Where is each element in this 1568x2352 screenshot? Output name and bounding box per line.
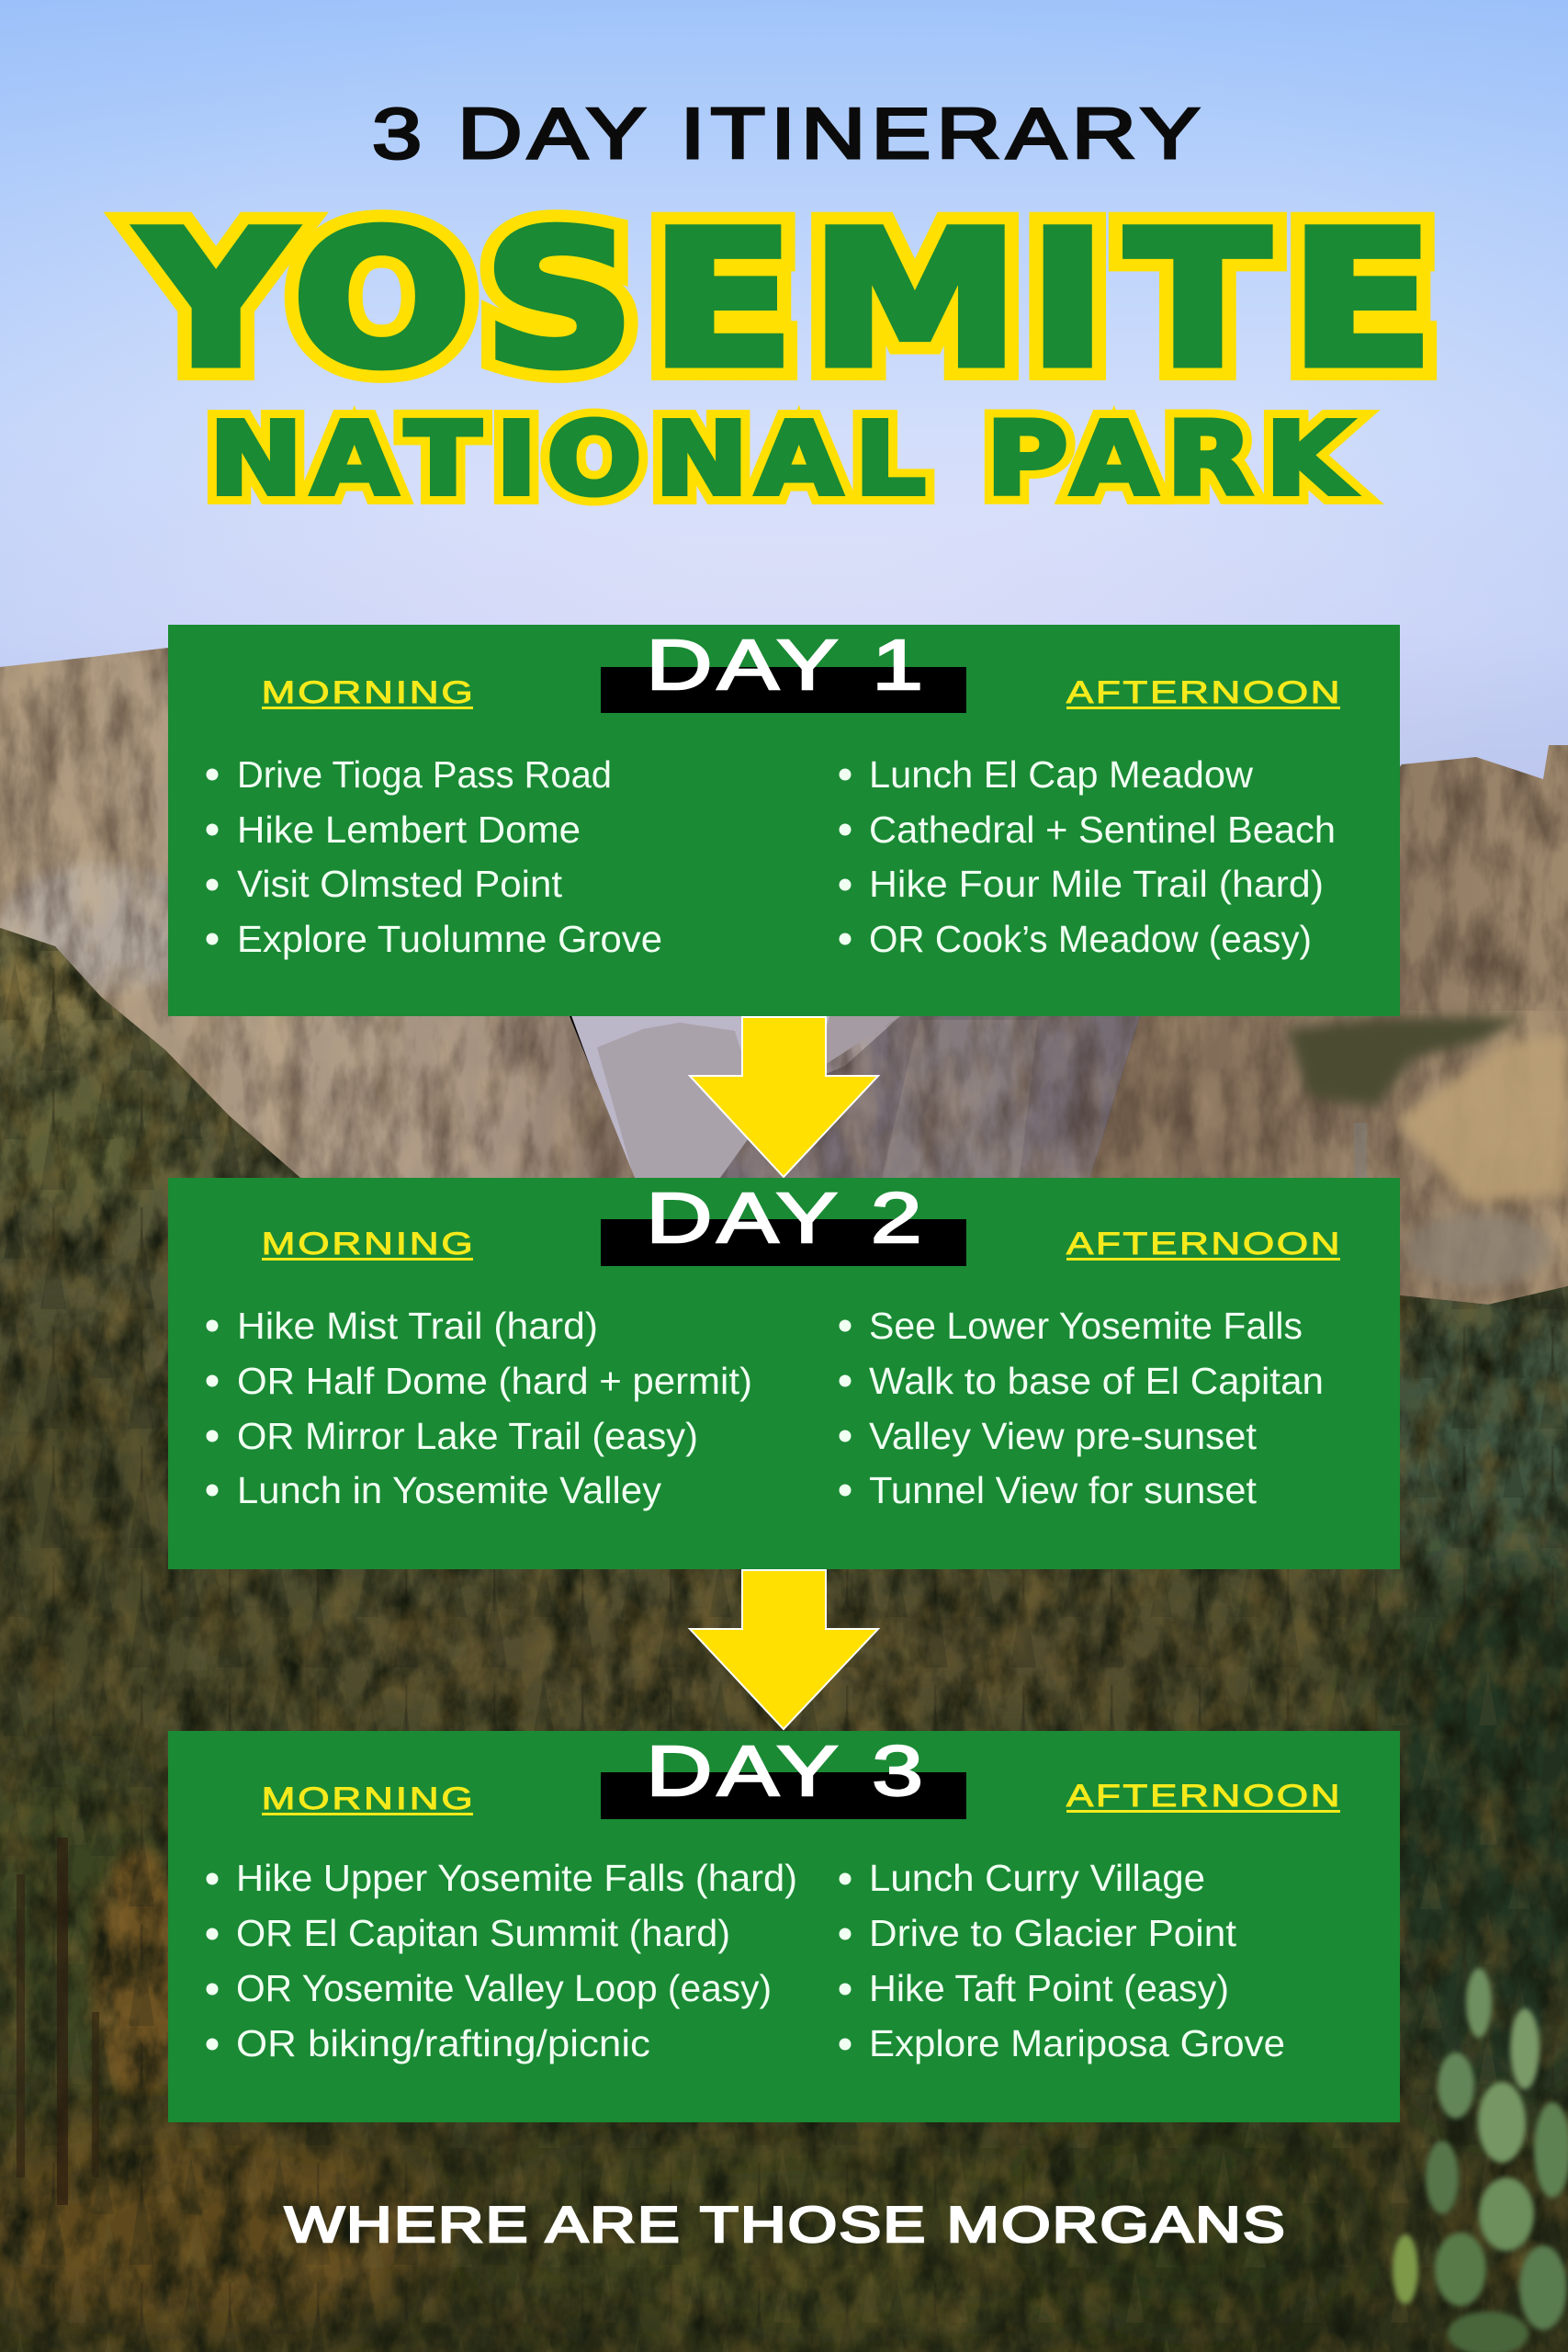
heading: day 1: DAY 1 (646, 625, 923, 704)
list: morning activities: OR Yosemite Valley Loop (easy) (236, 1967, 772, 2009)
panel: day 3 (168, 1731, 1400, 2122)
day 2 label bar (601, 1219, 966, 1266)
list: morning activities: OR El Capitan Summit (hard) (236, 1912, 730, 1954)
heading: morning: MORNING (262, 1781, 473, 1816)
panel: day 2 (168, 1178, 1400, 1569)
list: afternoon activities: Tunnel View for sunset (869, 1469, 1258, 1511)
heading: morning: MORNING (262, 675, 473, 710)
list: morning activities: OR Half Dome (hard + permit) (237, 1360, 752, 1402)
footer credit: WHERE ARE THOSE MORGANS (285, 2197, 1285, 2253)
list: morning activities: Lunch in Yosemite Valley (237, 1469, 662, 1511)
day 1 label bar (601, 667, 966, 713)
day 3 label bar (601, 1772, 966, 1819)
heading: afternoon: AFTERNOON (1066, 1779, 1340, 1814)
list: afternoon activities (840, 1857, 1285, 2064)
list: morning activities: Hike Upper Yosemite Falls (hard) (236, 1857, 797, 1899)
list: afternoon activities: Valley View pre-sunset (869, 1415, 1258, 1457)
list: afternoon activities: Lunch El Cap Meadow (869, 753, 1253, 796)
list: afternoon activities: Lunch Curry Village (869, 1857, 1205, 1899)
title: Yosemite: YOSEMITE (137, 192, 1434, 408)
list: afternoon activities (840, 1305, 1324, 1511)
list: afternoon activities: Cathedral + Sentinel Beach (869, 808, 1336, 851)
list: morning activities: Visit Olmsted Point (237, 863, 563, 905)
list: afternoon activities: See Lower Yosemite Falls (869, 1305, 1303, 1347)
list: afternoon activities: OR Cook’s Meadow (easy) (869, 918, 1312, 960)
heading: morning: MORNING (262, 1227, 473, 1261)
heading: day 2: DAY 2 (646, 1178, 922, 1257)
list: morning activities (206, 1857, 797, 2064)
list: morning activities (206, 1305, 752, 1511)
title: Yosemite: YOSEMITE (137, 192, 1434, 408)
list: morning activities: Explore Tuolumne Grove (237, 918, 662, 960)
subtitle: 3 Day Itinerary: 3 DAY ITINERARY (372, 93, 1200, 174)
list: afternoon activities: Hike Taft Point (easy) (869, 1967, 1229, 2009)
arrow: day 1 to day 2 (690, 1017, 878, 1177)
background: granite valley and forest (0, 643, 1568, 2352)
heading: afternoon: AFTERNOON (1066, 1227, 1340, 1261)
list: morning activities: Hike Mist Trail (hard) (237, 1305, 598, 1347)
background: sky (0, 0, 1568, 790)
list: morning activities: Drive Tioga Pass Road (237, 753, 612, 796)
title: National Park: NATIONAL PARK (209, 401, 1356, 518)
title: National Park: NATIONAL PARK (209, 401, 1356, 518)
list: afternoon activities: Hike Four Mile Trail (hard) (869, 863, 1324, 905)
list: afternoon activities: Walk to base of El Capitan (869, 1360, 1324, 1402)
panel: day 1 (168, 625, 1400, 1016)
list: afternoon activities: Drive to Glacier Point (869, 1912, 1237, 1954)
list: afternoon activities (840, 753, 1336, 960)
list: afternoon activities: Explore Mariposa Grove (869, 2022, 1285, 2064)
heading: afternoon: AFTERNOON (1066, 675, 1340, 710)
arrow: day 2 to day 3 (690, 1570, 878, 1729)
list: morning activities: Hike Lembert Dome (237, 808, 581, 851)
list: morning activities: OR biking/rafting/picnic (236, 2022, 650, 2064)
list: morning activities (206, 753, 662, 960)
heading: day 3: DAY 3 (646, 1731, 923, 1810)
list: morning activities: OR Mirror Lake Trail (easy) (237, 1415, 698, 1457)
